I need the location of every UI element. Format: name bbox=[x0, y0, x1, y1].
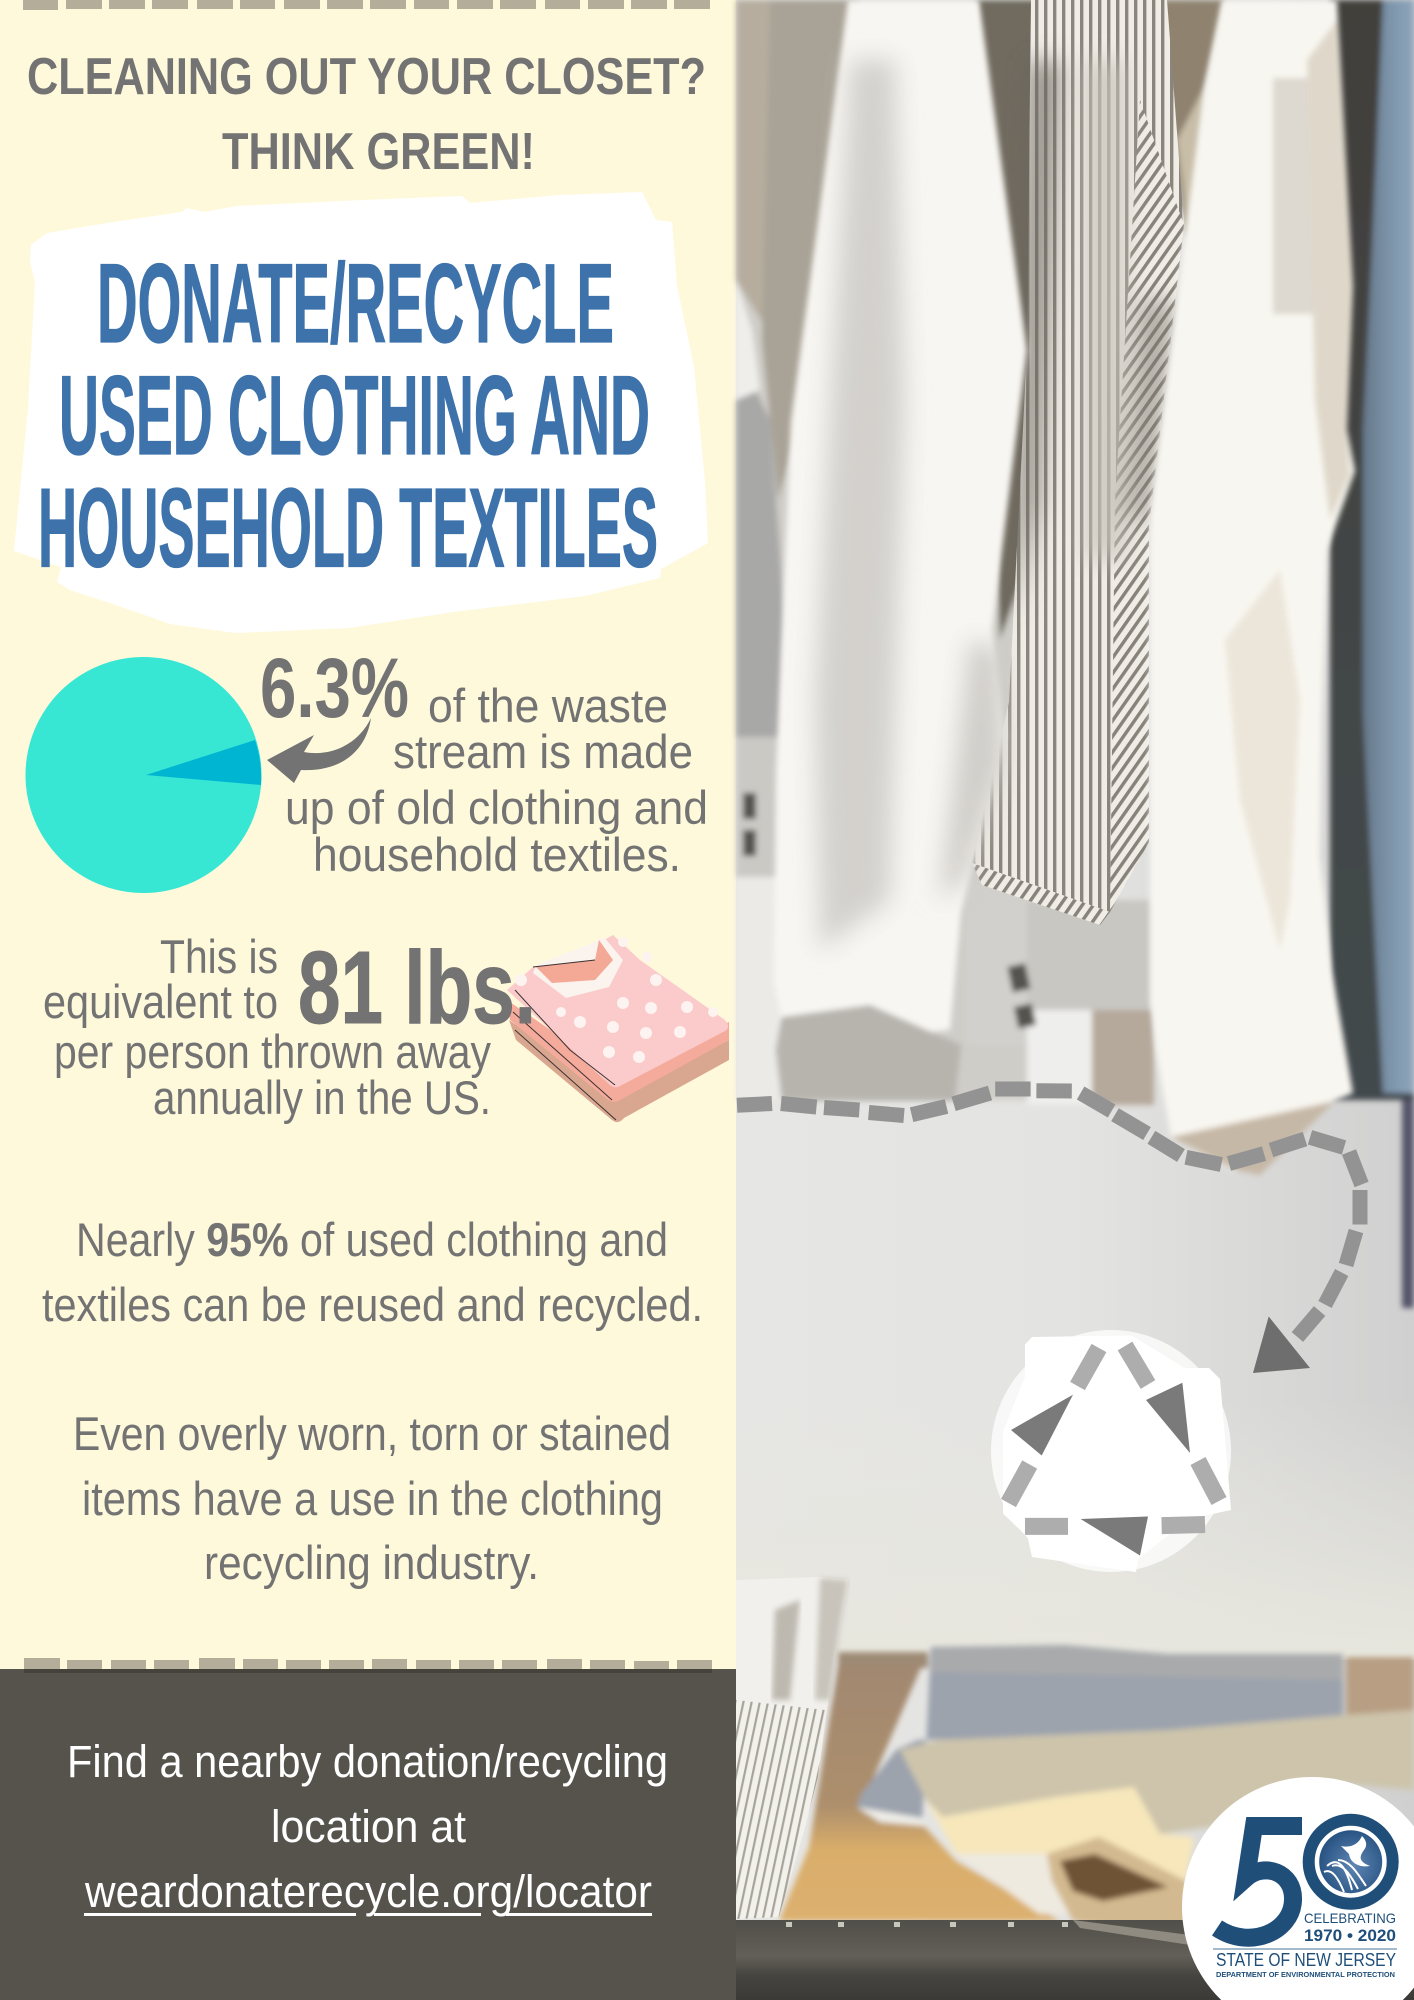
heading: cleaning out your closet: THINK GREEN! bbox=[222, 123, 535, 181]
text: 95 percent reusable: Nearly 95% of used clothing and bbox=[76, 1213, 668, 1266]
stat: 6.3 percent of waste stream bbox=[260, 641, 708, 881]
title: donate/recycle: DONATE/RECYCLE bbox=[97, 241, 614, 366]
dashed arrow: toward recycle symbol bbox=[737, 1089, 1362, 1337]
text: find a nearby location bbox=[67, 1736, 668, 1917]
text: worn items have a use bbox=[73, 1407, 671, 1589]
stat: 6.3 percent of waste stream: stream is made bbox=[393, 725, 693, 778]
stat: 81 lbs per person: equivalent to bbox=[43, 975, 278, 1028]
heading: cleaning out your closet: CLEANING OUT YOUR CLOSET? bbox=[27, 48, 706, 106]
panel: cream background bbox=[0, 0, 736, 2000]
text: worn items have a use: Even overly worn, torn or stained bbox=[73, 1407, 671, 1460]
dashed line shadow: footer bbox=[24, 1669, 712, 1673]
stat: 6.3 percent of waste stream: of the waste bbox=[428, 679, 668, 732]
logo: NJDEP 50 years: 1970 • 2020 bbox=[1304, 1926, 1396, 1945]
photo: cream shirt bbox=[1150, 0, 1355, 1175]
icon: curved arrow to pie bbox=[267, 718, 371, 783]
text: find a nearby location: Find a nearby donation/recycling bbox=[67, 1736, 668, 1787]
text: HOUSEHOLD TEXTILES bbox=[38, 466, 658, 590]
text: 95 percent reusable bbox=[42, 1213, 703, 1331]
title: donate/recycle bbox=[38, 241, 658, 590]
stat: 81 lbs per person: annually in the US. bbox=[153, 1071, 491, 1124]
stat: 6.3 percent of waste stream: up of old clothing and bbox=[285, 781, 708, 834]
text: find a nearby location: location at bbox=[271, 1801, 466, 1852]
dashed line: top bbox=[23, 0, 710, 10]
icon: recycle symbol on torn white circle bbox=[991, 1330, 1231, 1572]
text: find a nearby location: weardonaterecycle.org/locator bbox=[84, 1866, 652, 1917]
text: worn items have a use: items have a use in the clothing bbox=[82, 1472, 663, 1525]
logo: NJDEP 50 years: CELEBRATING bbox=[1304, 1910, 1396, 1926]
logo: NJDEP 50 years: DEPARTMENT OF ENVIRONMENTAL PROTECTION bbox=[1216, 1972, 1395, 1979]
text: worn items have a use: recycling industry. bbox=[204, 1536, 539, 1589]
photo: striped shirt bbox=[972, 0, 1184, 912]
title: donate/recycle: USED CLOTHING AND bbox=[59, 353, 650, 478]
stat: 6.3 percent of waste stream: household textiles. bbox=[313, 828, 681, 881]
panel: dark footer bbox=[0, 1669, 736, 2000]
pie chart: 6.3 percent bbox=[26, 657, 262, 893]
dashed line: footer bbox=[24, 1658, 712, 1670]
photo: hanging clothes and table bbox=[736, 0, 1414, 2000]
photo: light shirt bbox=[774, 0, 1027, 1100]
photo: table and folded items bbox=[736, 1577, 1414, 2000]
heading: cleaning out your closet bbox=[27, 48, 706, 181]
stat: 6.3 percent of waste stream: 6.3% bbox=[260, 641, 409, 735]
icon: folded pink shirts bbox=[507, 935, 729, 1122]
stat: 81 lbs per person: per person thrown away bbox=[54, 1025, 491, 1078]
text: 95 percent reusable: textiles can be reused and recycled. bbox=[42, 1278, 703, 1331]
stat: 81 lbs per person bbox=[43, 930, 536, 1124]
icon: arrowhead bbox=[1253, 1316, 1310, 1373]
stat: 81 lbs per person: This is bbox=[160, 930, 278, 983]
logo: NJDEP 50 years bbox=[1182, 1777, 1414, 2000]
panel: torn white paper bbox=[14, 192, 708, 633]
stat: 81 lbs per person: 81 lbs. bbox=[298, 930, 536, 1045]
